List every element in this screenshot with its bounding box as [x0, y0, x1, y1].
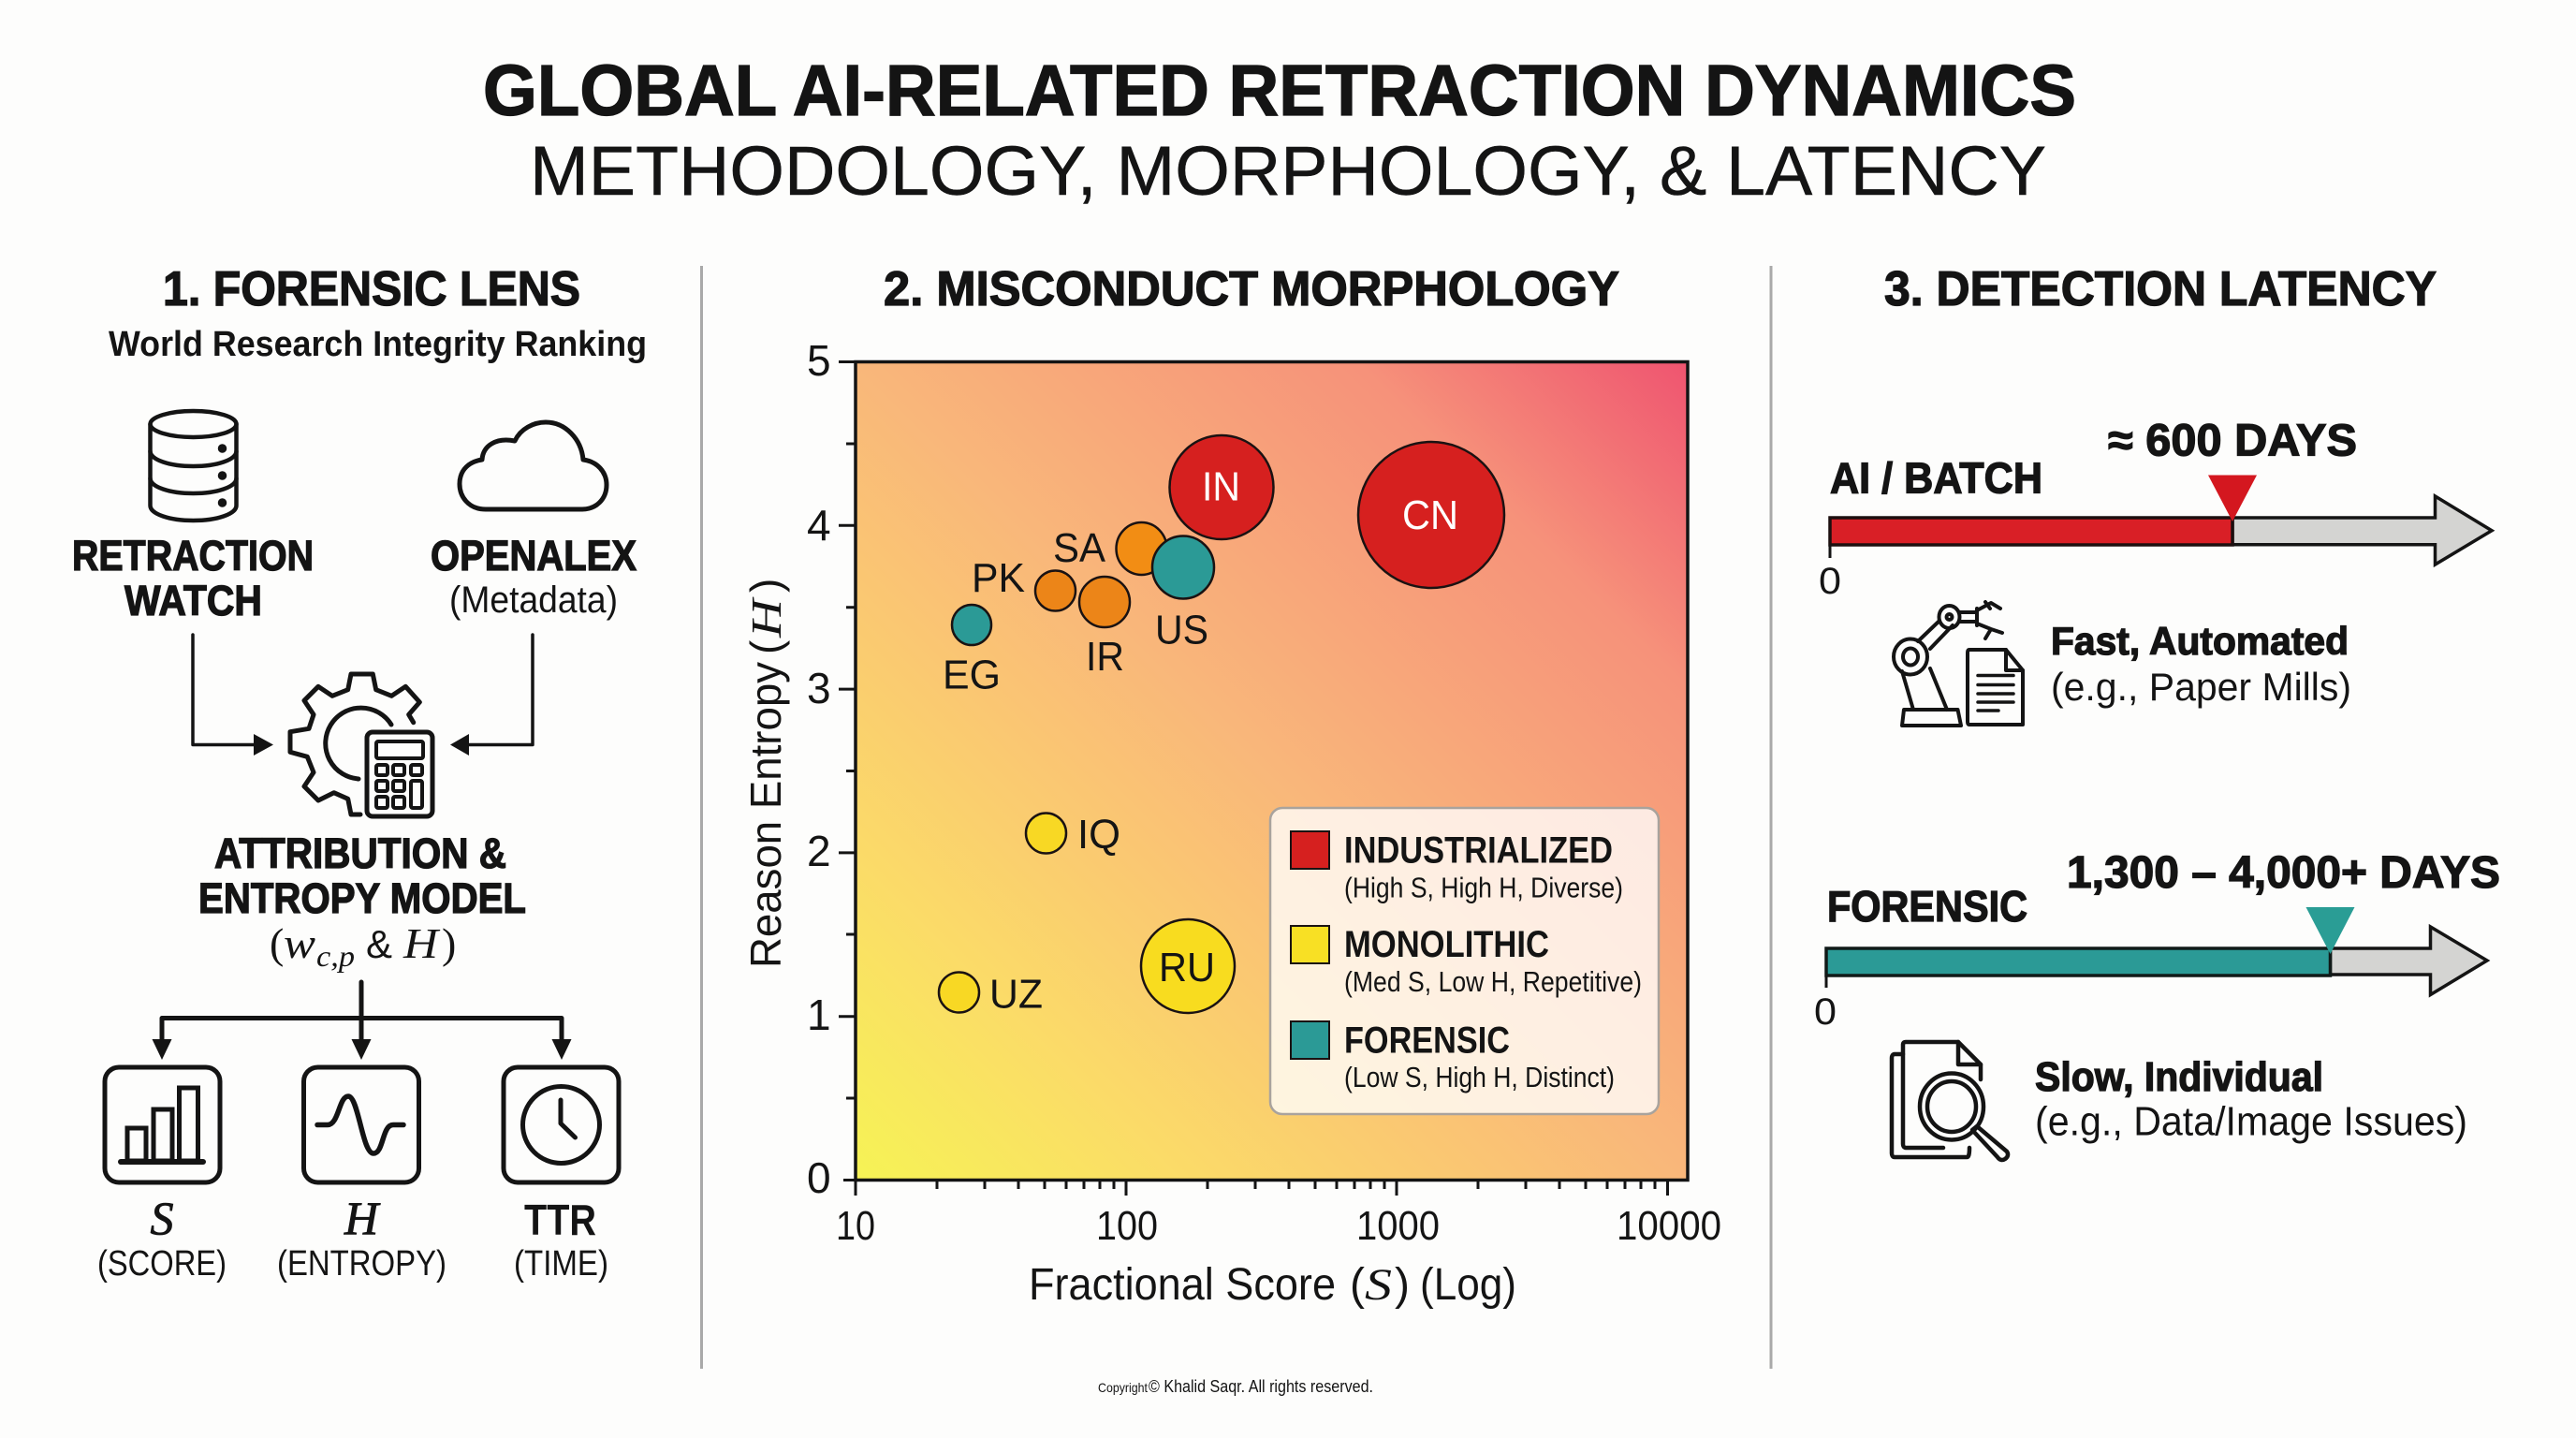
description: fast automated — [2051, 619, 2351, 709]
label: attribution and entropy model: w — [284, 919, 315, 967]
label: openalex: OPENALEX — [431, 532, 637, 580]
icon: gear with calculator — [290, 674, 432, 816]
subtitle: METHODOLOGY, MORPHOLOGY, & LATENCY — [530, 132, 2046, 210]
subheading: World Research Integrity Ranking — [109, 325, 647, 364]
bubble: RU: RU — [1159, 945, 1215, 990]
bubble: IN — [1170, 435, 1273, 539]
timeline: forensic: 1,300 – 4,000+ DAYS — [2067, 848, 2500, 898]
timeline: forensic: 0 — [1814, 991, 1837, 1033]
legend item: monolithic — [1291, 924, 1642, 998]
x axis tick labels — [836, 1203, 1721, 1249]
legend item: forensic: FORENSIC — [1344, 1020, 1510, 1062]
label: score: S — [150, 1192, 174, 1244]
label: attribution and entropy model: ( — [270, 919, 284, 967]
description: slow individual: Slow, Individual — [2035, 1054, 2323, 1100]
arrow: model to three outputs — [152, 982, 571, 1060]
y axis title: ( — [741, 639, 790, 654]
icon: document with magnifier — [1892, 1042, 2008, 1160]
timeline: AI batch: AI / BATCH — [1830, 453, 2042, 502]
y axis tick labels: 2 — [807, 827, 831, 875]
y axis tick labels: 4 — [807, 501, 831, 550]
icon: cloud — [460, 422, 607, 509]
label: ttr: TTR — [524, 1196, 596, 1244]
legend item: forensic — [1291, 1020, 1615, 1093]
timeline: forensic — [1814, 848, 2500, 1033]
label: score — [97, 1192, 227, 1284]
x axis tick labels: 1000 — [1356, 1203, 1440, 1249]
bubble: IQ — [1026, 812, 1120, 858]
label: attribution and entropy model: ATTRIBUTION & — [214, 829, 506, 877]
title: GLOBAL AI-RELATED RETRACTION DYNAMICS — [483, 51, 2076, 131]
bubble: EG — [943, 605, 1001, 698]
label: ttr: (TIME) — [514, 1244, 608, 1284]
label: retraction watch: RETRACTION — [72, 532, 314, 580]
legend — [1270, 808, 1659, 1114]
x axis title — [1029, 1260, 1516, 1310]
label: score: (SCORE) — [97, 1244, 227, 1284]
bubble: EG: EG — [943, 652, 1001, 698]
panel: detection latency — [1814, 262, 2500, 1160]
label: entropy: H — [344, 1192, 381, 1244]
legend item: monolithic: MONOLITHIC — [1344, 924, 1549, 965]
bubble: IQ: IQ — [1077, 812, 1120, 858]
y axis title: ) — [741, 579, 790, 593]
bubble: CN: CN — [1402, 492, 1458, 538]
label: attribution and entropy model: & — [366, 922, 392, 966]
bubble: SA — [1053, 522, 1166, 575]
bubble: US — [1152, 536, 1214, 653]
copyright: Copyright — [1098, 1380, 1148, 1395]
label: entropy: (ENTROPY) — [277, 1244, 446, 1284]
legend item: industrialized: (High S, High H, Diverse) — [1344, 871, 1623, 904]
bubble: UZ — [939, 972, 1043, 1017]
legend item: monolithic: (Med S, Low H, Repetitive) — [1344, 965, 1642, 998]
y axis title: Reason Entropy — [741, 662, 790, 968]
label: entropy — [277, 1192, 446, 1284]
y axis tick labels: 0 — [807, 1153, 831, 1202]
label: attribution and entropy model: H — [402, 919, 441, 967]
x axis tick labels: 100 — [1096, 1203, 1158, 1249]
description: slow individual: (e.g., Data/Image Issues) — [2035, 1099, 2467, 1144]
label: openalex: (Metadata) — [449, 580, 618, 621]
bubble: IN: IN — [1202, 464, 1240, 509]
description: fast automated: Fast, Automated — [2051, 619, 2349, 663]
heading: misconduct morphology: 2. MISCONDUCT MORPHOLOGY — [884, 262, 1619, 316]
bubble: UZ: UZ — [989, 972, 1043, 1017]
icon: robot arm and document — [1894, 602, 2023, 726]
icon: entropy wave — [303, 1067, 419, 1182]
x axis tick labels: 10 — [836, 1203, 875, 1249]
label: attribution and entropy model: ) — [442, 919, 456, 967]
arrow: openalex to model — [450, 635, 533, 756]
heading: forensic lens: 1. FORENSIC LENS — [163, 262, 580, 316]
icon: time clock — [504, 1067, 619, 1182]
bubble: SA: SA — [1053, 525, 1106, 571]
x axis title: ) — [1395, 1260, 1410, 1310]
x axis tick labels: 10000 — [1617, 1203, 1721, 1249]
legend item: industrialized: INDUSTRIALIZED — [1344, 829, 1613, 871]
y axis tick labels: 3 — [807, 664, 831, 712]
bubble: CN — [1358, 442, 1504, 588]
bubble: IR — [1079, 577, 1130, 680]
y axis tick labels: 1 — [807, 990, 831, 1039]
chart: bubble scatter plot — [741, 336, 1721, 1310]
arrow: retraction watch to model — [193, 635, 273, 756]
label: openalex — [431, 532, 637, 621]
description: fast automated: (e.g., Paper Mills) — [2051, 665, 2351, 709]
label: attribution and entropy model: ENTROPY MODEL — [198, 874, 526, 922]
panel: forensic lens — [72, 262, 647, 1284]
bubble: PK — [972, 555, 1076, 610]
label: retraction watch — [72, 532, 314, 624]
bubble: RU — [1141, 919, 1235, 1013]
timeline: forensic: FORENSIC — [1827, 882, 2027, 931]
panel: misconduct morphology — [741, 262, 1721, 1310]
label: attribution and entropy model — [198, 829, 526, 973]
y axis tick labels: 5 — [807, 336, 831, 385]
label: attribution and entropy model: c,p — [316, 939, 355, 973]
copyright: © Khalid Saqr. All rights reserved. — [1149, 1377, 1373, 1396]
icon: database — [150, 411, 236, 521]
heading: detection latency: 3. DETECTION LATENCY — [1884, 262, 2437, 316]
label: ttr — [514, 1196, 608, 1284]
timeline: AI batch: 0 — [1819, 561, 1841, 602]
x axis title: Fractional Score — [1029, 1260, 1336, 1310]
bubble: US: US — [1155, 607, 1208, 653]
legend item: forensic: (Low S, High H, Distinct) — [1344, 1061, 1615, 1093]
title — [483, 51, 2076, 210]
bubble: PK: PK — [972, 555, 1025, 601]
legend item: industrialized — [1291, 829, 1623, 904]
bubble: IR: IR — [1086, 634, 1124, 680]
label: retraction watch: WATCH — [124, 577, 262, 624]
timeline: AI batch — [1819, 416, 2492, 602]
description: slow individual — [2035, 1054, 2467, 1144]
timeline: AI batch: ≈ 600 DAYS — [2108, 416, 2357, 466]
x axis title: ( — [1350, 1260, 1365, 1310]
icon: score bar chart — [105, 1067, 220, 1182]
y axis tick labels — [807, 336, 831, 1202]
x axis title: (Log) — [1420, 1260, 1516, 1310]
x axis title: S — [1365, 1260, 1392, 1310]
y axis title: H — [742, 596, 790, 638]
